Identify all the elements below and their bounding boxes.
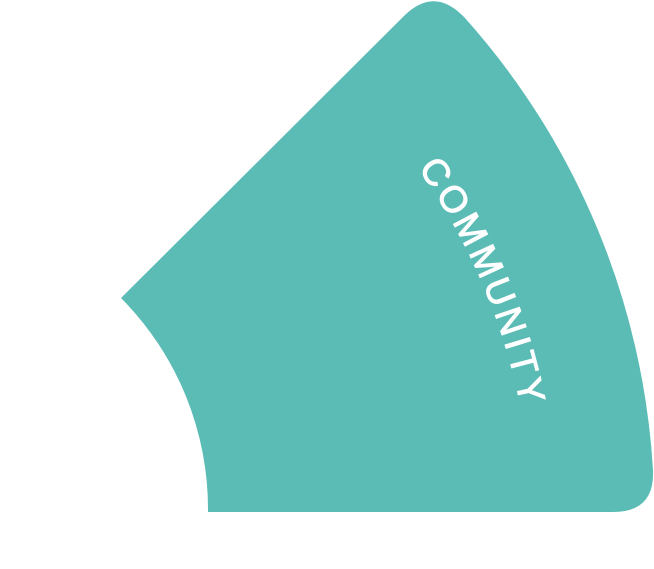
sector shape [121,1,653,512]
label: COMMUNITY: COMMUNITY [422,159,546,400]
